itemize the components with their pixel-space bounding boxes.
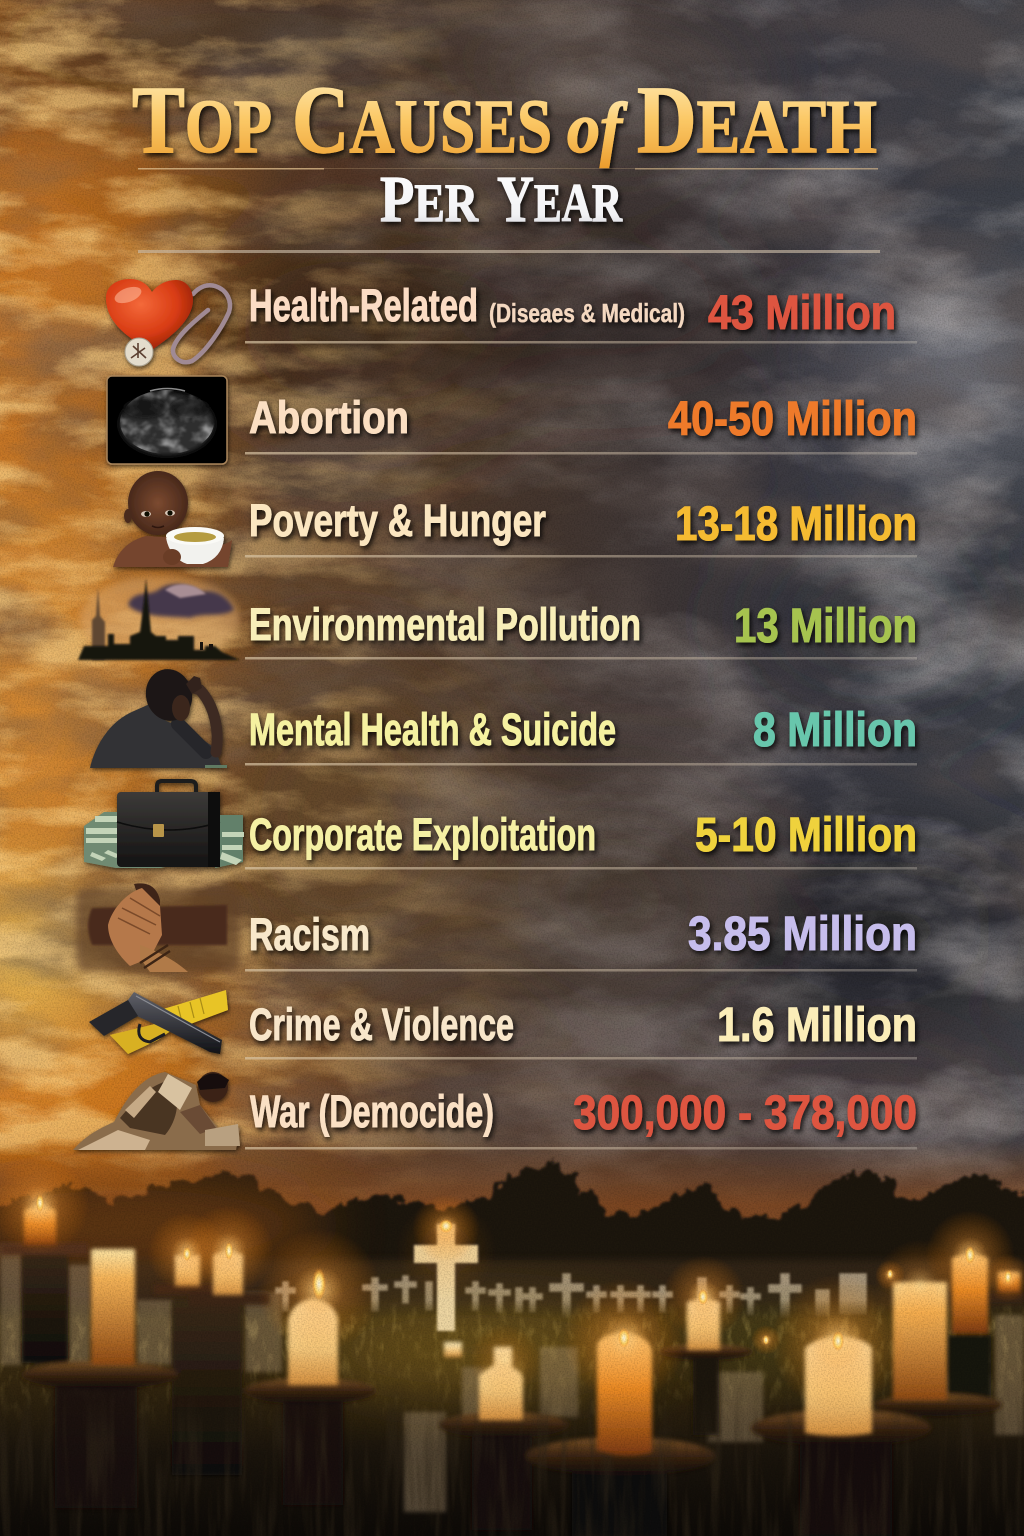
icon: ultrasound scan: [107, 376, 227, 464]
tall white cross: [396, 1200, 496, 1331]
value: 5-10 Million: [695, 809, 917, 862]
cemetery scene with candles: [0, 1140, 1024, 1536]
subtitle: [380, 163, 623, 236]
title: TOP: [132, 66, 272, 173]
icon: polluted city skyline: [78, 576, 240, 660]
icon: clasped hands: [76, 883, 240, 972]
row: Crime & Violence: [89, 990, 917, 1060]
rows of small crosses: [276, 1274, 866, 1322]
grass ground: [0, 1300, 1024, 1536]
value: 1.6 Million: [717, 999, 917, 1052]
title: DEATH: [637, 66, 877, 173]
sublabel: (Diseaes & Medical): [489, 298, 685, 328]
icon: briefcase and cash: [84, 781, 244, 868]
icon: kneeling soldier: [73, 1072, 240, 1150]
header divider: [138, 250, 880, 253]
value: 13-18 Million: [675, 498, 917, 551]
icon: child with bowl: [113, 471, 232, 567]
candle stands: [0, 1243, 1024, 1536]
title: of: [567, 88, 628, 168]
label: Mental Health & Suicide: [249, 704, 616, 755]
icon: pistol and police tape: [89, 990, 228, 1054]
value: 8 Million: [753, 704, 917, 757]
row: Racism: [76, 883, 917, 972]
title underline: [138, 168, 878, 170]
label: Poverty & Hunger: [249, 495, 546, 546]
label: Racism: [249, 909, 370, 960]
tree line silhouette: [0, 1162, 1024, 1330]
label: Abortion: [249, 392, 409, 443]
value: 3.85 Million: [688, 908, 917, 961]
value: 300,000 - 378,000: [573, 1087, 917, 1140]
subtitle: YEAR: [497, 163, 623, 236]
background: stormy sunset sky: [0, 0, 1024, 1214]
value: 43 Million: [708, 287, 896, 340]
title: [132, 66, 877, 173]
row: Environmental Pollution: [78, 576, 917, 660]
dim haze behind crosses: [0, 1260, 1024, 1310]
candles: [24, 1205, 1020, 1456]
horizon glow: [0, 1140, 1024, 1270]
label: Crime & Violence: [249, 999, 514, 1050]
value: 40-50 Million: [668, 393, 917, 446]
label: Health-Related: [249, 280, 478, 331]
row: Corporate Exploitation: [84, 781, 917, 870]
row: Health-Related: [106, 279, 917, 366]
row: Poverty & Hunger: [113, 471, 917, 567]
label: War (Democide): [250, 1086, 494, 1137]
value: 13 Million: [734, 600, 917, 653]
warm haze over left trees: [0, 1170, 330, 1280]
row: Mental Health & Suicide: [90, 664, 917, 768]
title: CAUSES: [292, 66, 552, 173]
candle flames and glows: [0, 1155, 1024, 1410]
row: Abortion: [107, 376, 917, 464]
icon: heart and stethoscope: [106, 279, 230, 366]
label: Corporate Exploitation: [249, 809, 596, 860]
pale grave slabs: [0, 1245, 1024, 1512]
label: Environmental Pollution: [249, 599, 641, 650]
vertical smear texture: [0, 1396, 1021, 1536]
icon: despairing man: [90, 664, 227, 768]
subtitle: PER: [380, 163, 479, 236]
row: War (Democide): [73, 1072, 917, 1150]
